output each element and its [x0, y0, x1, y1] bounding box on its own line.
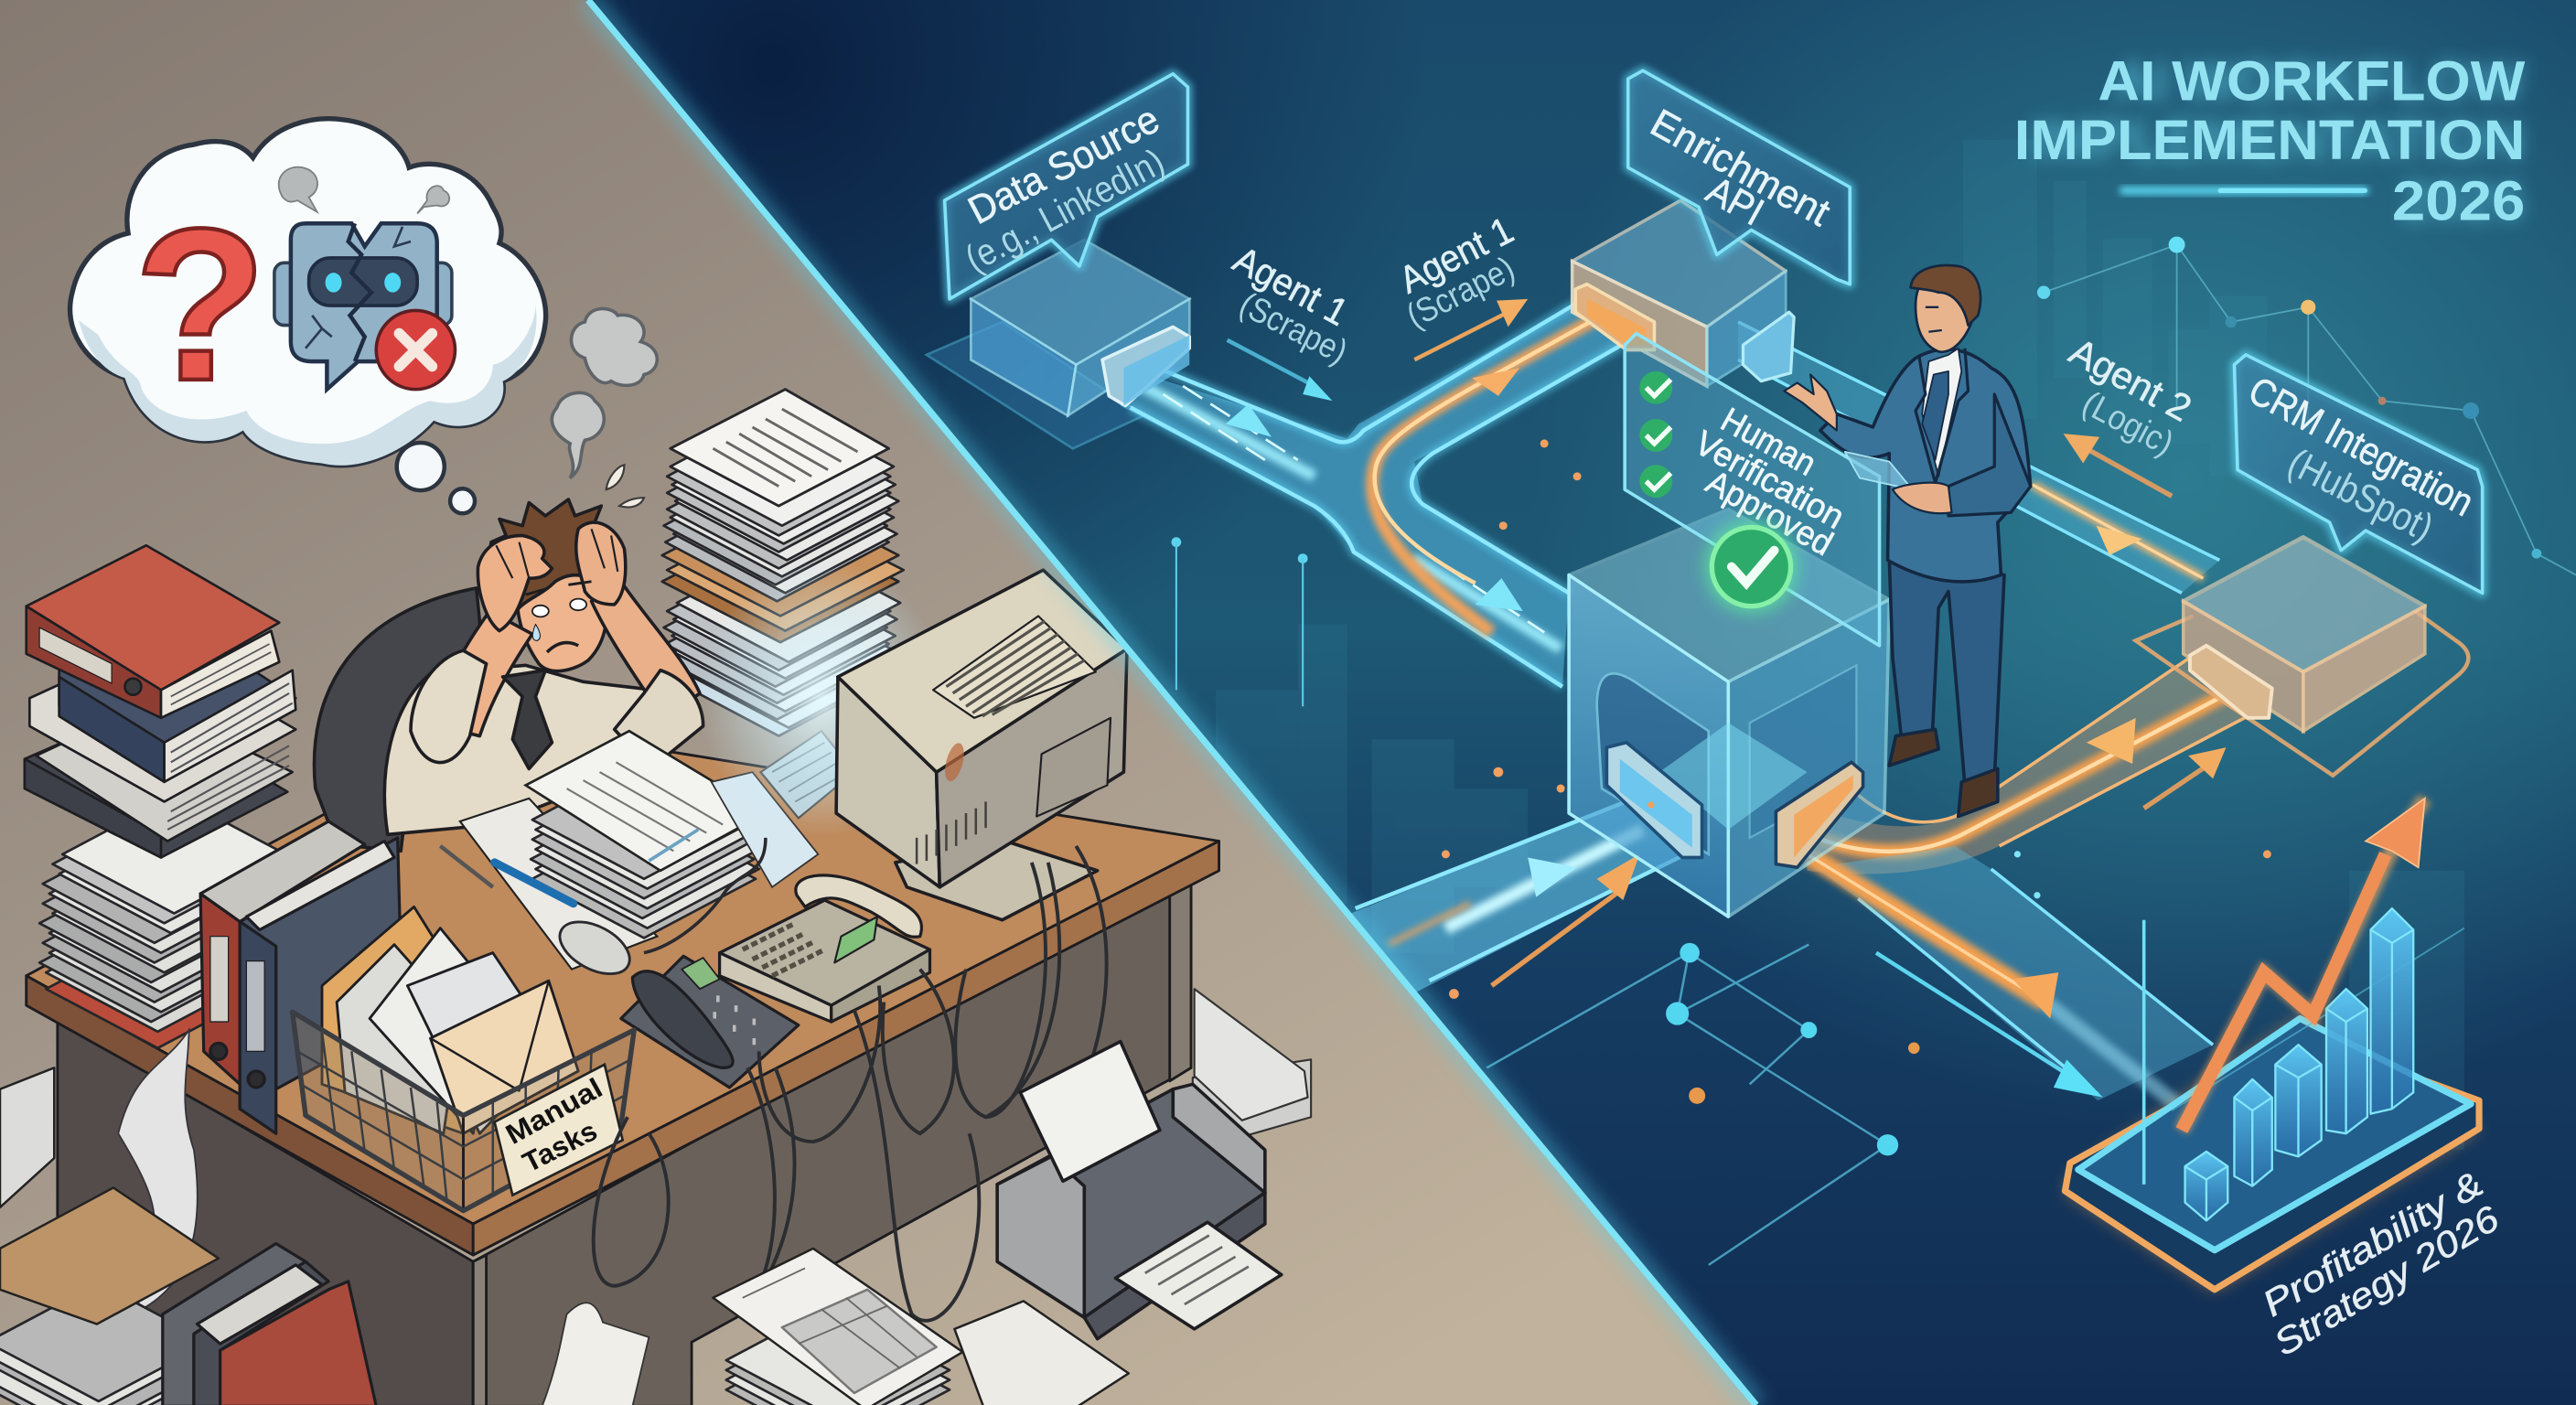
label: agent 1 scrape right — [1392, 209, 1520, 335]
label: agent 1 scrape left: (Scrape) — [1234, 284, 1354, 370]
icon: blue pen — [440, 846, 574, 904]
icon: small smoke puffs in bubble — [279, 167, 449, 213]
cube: data source — [927, 240, 1189, 448]
man in suit — [1784, 265, 2031, 817]
callout: enrichment API: Enrichment — [1643, 101, 1837, 235]
binder stack left — [25, 545, 295, 1048]
callout: data source: Data Source — [961, 97, 1166, 233]
stack of papers right of man — [662, 390, 904, 736]
title accent bar — [2120, 187, 2369, 195]
arrow: long blue to chart — [1876, 953, 2103, 1098]
panel: human verification — [1625, 334, 1880, 646]
pipe: enrichment to CRM — [1738, 322, 2219, 593]
icon: red question mark: ? — [134, 184, 267, 426]
icon: broken robot — [274, 223, 452, 390]
sign: manual tasks: Manual — [500, 1072, 607, 1151]
label: agent 1 scrape right: Agent 1 — [1392, 209, 1520, 301]
floor paper stack right — [713, 1249, 1129, 1405]
man at desk — [314, 499, 703, 851]
panel: human verification: Verification — [1689, 423, 1851, 536]
callout: data source: (e.g., LinkedIn) — [959, 140, 1171, 280]
glowing particles — [1171, 439, 2271, 999]
wire basket of documents — [293, 906, 634, 1211]
network lines and nodes top right — [2037, 237, 2576, 575]
cube: CRM integration — [2136, 537, 2468, 776]
panel: human verification: Human — [1715, 400, 1822, 483]
papers on desk centre — [460, 731, 818, 970]
thought bubble — [70, 119, 546, 513]
printer — [997, 1042, 1282, 1339]
callout: enrichment API — [1628, 70, 1850, 284]
diagonal divider — [588, 0, 1756, 1405]
panel: manual chaos side — [0, 0, 1808, 1405]
title: AI WORKFLOW — [2112, 50, 2526, 113]
icon: smoke clouds above head — [552, 308, 657, 478]
bar chart — [2185, 908, 2413, 1220]
paper on floor centre — [542, 1303, 649, 1405]
pipe: blue feed into main cube — [1315, 792, 1686, 994]
panel: AI workflow side — [575, 0, 2576, 1405]
title: 2026 — [2392, 170, 2525, 232]
desk base and side panels — [27, 723, 1219, 1405]
arrow: down right blue — [1228, 340, 1332, 401]
callout: CRM integration — [2234, 355, 2483, 593]
callout: data source — [945, 74, 1187, 299]
cube: enrichment API — [1572, 200, 1794, 386]
title: IMPLEMENTATION — [2014, 109, 2525, 171]
upright binders — [200, 821, 402, 1133]
floor paper stack left — [0, 1067, 219, 1405]
keyboard on desk — [761, 731, 854, 818]
label: agent 2 logic: (Logic) — [2077, 383, 2180, 463]
arrow: agent 2 orange — [2064, 434, 2172, 496]
pipes: branching blue conduit — [1102, 304, 1622, 687]
chart platform — [2065, 920, 2479, 1290]
arrow: orange near CRM — [2144, 747, 2226, 809]
chart caption: Profitability & — [2256, 1164, 2490, 1325]
icon: red x badge — [376, 310, 455, 390]
callout: CRM integration: (HubSpot) — [2281, 441, 2440, 551]
binders on floor — [163, 1244, 376, 1405]
arrow: orange bottom left — [1492, 854, 1639, 986]
retro CRT monitor — [836, 570, 1127, 920]
label: agent 1 scrape left: Agent 1 — [1227, 238, 1355, 334]
sign: manual tasks: Tasks — [518, 1115, 602, 1179]
icon: mouse — [552, 838, 766, 984]
growth arrow — [2182, 799, 2425, 1131]
network bottom — [1487, 943, 1920, 1265]
dark desk phone — [621, 956, 799, 1088]
sign: manual tasks — [495, 1065, 623, 1196]
arrow: up right orange — [1414, 299, 1528, 359]
pipe: branch to chart — [1808, 846, 2213, 1117]
floor papers behind printer — [1193, 989, 1311, 1137]
callout: CRM integration: CRM Integration — [2241, 369, 2481, 525]
chart caption: Strategy 2026 — [2267, 1198, 2506, 1364]
title — [2014, 50, 2526, 232]
curled paper — [89, 1030, 198, 1308]
pipe: orange branch to CRM — [1808, 659, 2254, 874]
beige desk phone — [720, 875, 929, 1022]
icon: approved badge — [1705, 520, 1798, 613]
faint skyline background — [1216, 140, 2464, 1150]
title: IMPLEMENTATION — [2031, 109, 2525, 171]
title: 2026 — [2401, 170, 2525, 232]
callout: enrichment API: API — [1700, 168, 1771, 235]
label: agent 2 logic: Agent 2 — [2063, 330, 2198, 430]
icons: verification checks — [1639, 371, 1672, 498]
title: AI WORKFLOW — [2098, 50, 2526, 113]
screen glow — [698, 559, 945, 838]
label: agent 1 scrape right: (Scrape) — [1401, 249, 1520, 335]
tangled cables — [594, 846, 1107, 1321]
chart caption — [2256, 1164, 2506, 1364]
icon: sweat drops — [606, 465, 644, 508]
main glass cube — [1569, 509, 1889, 917]
panel: human verification: Approved — [1700, 462, 1840, 563]
